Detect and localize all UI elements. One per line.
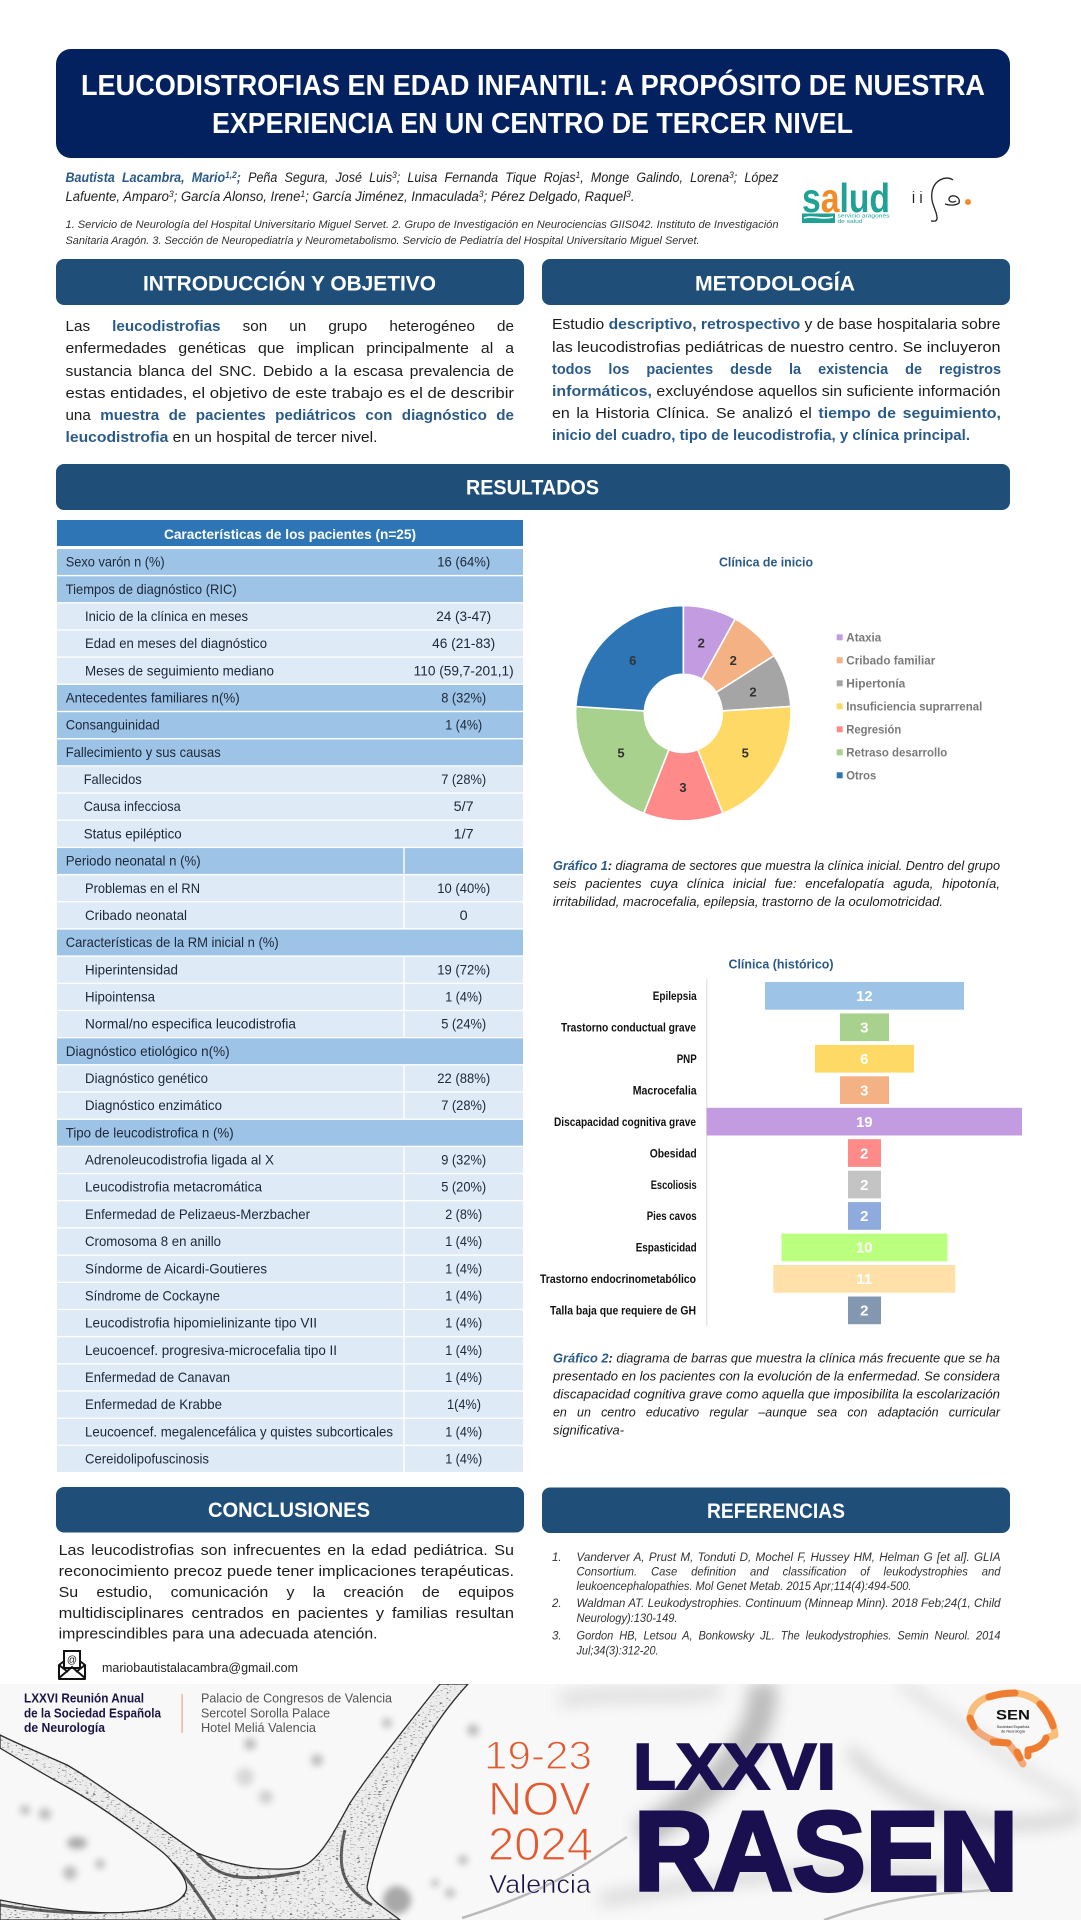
- donut chart: clínica de inicio: 5: [617, 745, 625, 760]
- bar: macrocefalia: 3: [860, 1082, 868, 1099]
- banner text: reunión anual: de Neurología: [24, 1721, 106, 1735]
- title: [56, 49, 1010, 158]
- banner text: sedes: Hotel Meliá Valencia: [201, 1721, 316, 1735]
- pie legend: Hipertonía: [846, 676, 906, 690]
- row: adrenoleucodistrofia: [57, 1147, 523, 1173]
- banner title: LXXVI RASEN: RASEN: [634, 1789, 1018, 1914]
- text: metodología: informáticos, excluyéndose aquellos sin suficiente información: [552, 384, 1000, 400]
- row: metacromática: Leucodistrofia metacromática: [85, 1180, 262, 1195]
- pie legend: Retraso desarrollo: [846, 746, 947, 760]
- heading: resultados: [56, 464, 1010, 510]
- heading: referencias: REFERENCIAS: [707, 1500, 845, 1523]
- row: seguimiento: Meses de seguimiento mediano: [85, 663, 274, 678]
- row: fallecimiento: [57, 739, 523, 765]
- bar: trastorno endocrinometabólico: Trastorno endocrinometabólico: [540, 1274, 696, 1286]
- row: enzimático: [57, 1093, 523, 1118]
- row: seguimiento: [57, 658, 523, 684]
- bar: trastorno conductual: [561, 1013, 889, 1041]
- bar chart title: clínica (histórico): Clínica (histórico): [728, 956, 834, 972]
- authors: 3: [169, 189, 174, 199]
- text: conclusiones: [59, 1542, 514, 1642]
- list: referencias: Gordon HB, Letsou A, Bonkowsky JL. The leukodystrophies. Semin Neurol. 2014: [576, 1630, 1000, 1642]
- donut chart: clínica de inicio: [576, 606, 791, 821]
- row: sexo: 16 (64%): [437, 555, 490, 570]
- text: introducción: leucodistrofia en un hospital de tercer nivel.: [66, 430, 378, 446]
- row: metacromática: 5 (20%): [441, 1180, 486, 1195]
- caption: gráfico 1: seis pacientes cuya clínica inicial fue: encefalopatía aguda, hipotonía,: [553, 876, 1000, 891]
- text: metodología: inicio del cuadro, tipo de leucodistrofia, y clínica principal.: [552, 428, 970, 444]
- title: EXPERIENCIA EN UN CENTRO DE TERCER NIVEL: [212, 108, 853, 140]
- list: referencias: 2.: [551, 1598, 562, 1610]
- row: tiempos: [57, 576, 523, 602]
- row: consanguinidad: 1 (4%): [445, 718, 482, 733]
- text: conclusiones: multidisciplinares centrados en pacientes y familias resultan: [59, 1605, 514, 1622]
- authors: 3: [392, 170, 397, 180]
- icon: envelope: [59, 1651, 85, 1679]
- banner text: fechas: NOV: [488, 1772, 592, 1825]
- heading: conclusiones: CONCLUSIONES: [208, 1499, 370, 1522]
- text: metodología: en la Historia Clínica. Se analizó el tiempo de seguimiento,: [552, 406, 1001, 422]
- row: enzimático: 7 (28%): [441, 1098, 486, 1113]
- row: aicardi: Síndorme de Aicardi-Goutieres: [85, 1261, 267, 1276]
- row: hiperintensidad: [57, 957, 523, 983]
- row: hipomielinizante: 1 (4%): [445, 1316, 482, 1331]
- icon: envelope: @: [67, 1655, 77, 1666]
- affiliations: 1. Servicio de Neurología del Hospital Universitario Miguel Servet. 2. Grupo de Investigación en Neurociencias GIIS042. Instituto de Investigación: [66, 219, 778, 231]
- banner text: sedes: [202, 1693, 392, 1732]
- bar: escoliosis: 2: [860, 1177, 868, 1194]
- authors: ;: [174, 189, 178, 204]
- row: problemas RN: [57, 875, 523, 901]
- bar: espasticidad: Espasticidad: [636, 1243, 697, 1255]
- row: hipomielinizante: [57, 1310, 523, 1336]
- text: introducción: Las leucodistrofias son un grupo heterogéneo de: [66, 319, 514, 335]
- list: referencias: Waldman AT. Leukodystrophies. Continuum (Minneap Minn). 2018 Feb;24(1, Child: [576, 1598, 1001, 1610]
- table header: Características de los pacientes (n=25): [164, 526, 416, 542]
- banner text: reunión anual: LXXVI Reunión Anual: [24, 1692, 144, 1706]
- caption: gráfico 2: discapacidad cognitiva grave como aquella que imposibilita la escolarización: [553, 1386, 1000, 1402]
- row: genético: Diagnóstico genético: [85, 1071, 208, 1086]
- authors: Peña Segura, José Luis: [249, 170, 404, 185]
- pie legend: Regresión: [846, 722, 901, 736]
- row: edad: 46 (21-83): [432, 636, 495, 651]
- row: megalencefálica: 1 (4%): [445, 1424, 482, 1439]
- text: metodología: Estudio descriptivo, retrospectivo y de base hospitalaria sobre: [552, 317, 1000, 333]
- row: periodo neonatal: [57, 848, 523, 874]
- bar: trastorno endocrinometabólico: 11: [856, 1271, 872, 1288]
- bar: espasticidad: 10: [856, 1240, 873, 1257]
- bar: pies cavos: Pies cavos: [647, 1211, 697, 1223]
- pie legend: [837, 630, 982, 782]
- authors: .: [631, 189, 634, 204]
- row: RM inicial: Características de la RM inicial n (%): [66, 935, 279, 950]
- caption: gráfico 2: presentado en los pacientes con la evolución de la enfermedad. Se considera: [552, 1368, 1000, 1384]
- row: fallecimiento: Fallecimiento y sus causas: [66, 745, 221, 760]
- row: pelizaeus: 2 (8%): [445, 1207, 482, 1222]
- caption: gráfico 2: en un centro educativo regular –aunque sea con adaptación curricular: [553, 1404, 1001, 1420]
- row: sexo: [57, 549, 523, 575]
- heading: metodología: METODOLOGÍA: [695, 272, 855, 296]
- list: referencias: leukoencephalopathies. Mol Genet Metab. 2015 Apr;114(4):494-500.: [576, 1581, 912, 1593]
- text: conclusiones: Su estudio, comunicación y la creación de equipos: [59, 1584, 514, 1601]
- bar: PNP: PNP: [677, 1054, 697, 1066]
- bar: talla baja: 2: [860, 1303, 868, 1320]
- row: krabbe: Enfermedad de Krabbe: [85, 1397, 222, 1412]
- row: cromosoma 8: Cromosoma 8 en anillo: [85, 1234, 221, 1249]
- bar: pies cavos: 2: [860, 1208, 868, 1225]
- row: problemas RN: Problemas en el RN: [85, 881, 200, 896]
- logo: SEN: Sociedad Española: [997, 1725, 1030, 1729]
- caption: gráfico 1: [553, 858, 1000, 909]
- authors: [66, 170, 779, 204]
- pie legend: Insuficiencia suprarrenal: [846, 700, 982, 714]
- authors: ;: [397, 170, 400, 185]
- logo: SEN: de Neurología: [1001, 1730, 1026, 1734]
- bar: espasticidad: [636, 1234, 948, 1261]
- banner text: sedes: Sercotel Sorolla Palace: [201, 1706, 330, 1720]
- row: metacromática: [57, 1174, 523, 1200]
- bar: escoliosis: [651, 1171, 881, 1198]
- logo: SEN: [970, 1693, 1055, 1764]
- row: cromosoma 8: [57, 1229, 523, 1254]
- bar chart: clínica (histórico): [540, 979, 1022, 1326]
- bar: escoliosis: Escoliosis: [651, 1180, 697, 1192]
- authors: Pérez Delgado, Raquel: [491, 189, 631, 204]
- heading: metodología: [542, 259, 1010, 305]
- row: cockayne: Síndrome de Cockayne: [85, 1288, 220, 1304]
- text: metodología: todos los pacientes desde la existencia de registros: [552, 362, 1001, 378]
- bar: epilepsia: 12: [856, 988, 873, 1005]
- logo: iisa: [914, 178, 971, 221]
- banner image: neuron: [0, 1684, 470, 1920]
- caption: gráfico 1: irritabilidad, macrocefalia, epilepsia, trastorno de la oculomotricidad.: [553, 894, 943, 909]
- row: antecedentes: 8 (32%): [441, 690, 486, 706]
- bar: talla baja: [550, 1296, 881, 1324]
- row: hipomielinizante: Leucodistrofia hipomielinizante tipo VII: [85, 1316, 317, 1331]
- list: referencias: [551, 1552, 1001, 1658]
- row: hipointensa: 1 (4%): [445, 990, 482, 1004]
- row: pelizaeus: Enfermedad de Pelizaeus-Merzbacher: [85, 1207, 310, 1222]
- list: referencias: Consortium. Case definition and classification of leukodystrophies and: [576, 1566, 1001, 1578]
- authors: ,: [580, 170, 584, 185]
- row: normal: 5 (24%): [441, 1017, 486, 1032]
- row: diagnóstico etiológico: [57, 1038, 523, 1064]
- text: conclusiones: imprescindibles para una adecuada atención.: [59, 1626, 378, 1642]
- row: tipo: [57, 1120, 523, 1146]
- banner: congreso LXXVI RASEN: [0, 1684, 1081, 1920]
- row: genético: 22 (88%): [437, 1071, 490, 1086]
- row: inicio: 24 (3-47): [436, 609, 491, 624]
- caption: gráfico 2: significativa-: [553, 1422, 625, 1438]
- text: introducción: [66, 319, 515, 446]
- authors: García Alonso, Irene: [181, 189, 304, 204]
- row: megalencefálica: Leucoencef. megalencefálica y quistes subcorticales: [85, 1424, 393, 1439]
- heading: referencias: [542, 1488, 1010, 1533]
- row: status: Status epiléptico: [84, 826, 182, 841]
- donut chart: clínica de inicio: 6: [629, 653, 636, 668]
- bar: obesidad: Obesidad: [650, 1148, 697, 1160]
- authors: 3: [729, 170, 734, 180]
- affiliations: [66, 219, 778, 247]
- row: causa infecciosa: 5/7: [454, 799, 474, 814]
- row: causa infecciosa: Causa infecciosa: [84, 799, 181, 814]
- row: aicardi: [57, 1256, 523, 1282]
- row: antecedentes: Antecedentes familiares n(%): [66, 690, 240, 706]
- authors: 1: [300, 189, 305, 199]
- logo: salud: salud: [802, 175, 890, 221]
- donut chart: clínica de inicio: 5: [742, 745, 749, 760]
- authors: Lafuente, Amparo: [66, 189, 172, 204]
- banner title: LXXVI RASEN: LXXVI: [633, 1730, 836, 1803]
- bar: pies cavos: [647, 1202, 881, 1230]
- row: hipointensa: Hipointensa: [85, 990, 155, 1004]
- bar: talla baja: Talla baja que requiere de GH: [550, 1306, 696, 1318]
- row: fallecidos: Fallecidos: [84, 772, 142, 787]
- pie legend: Cribado familiar: [846, 654, 936, 668]
- pie legend: Otros: [846, 768, 877, 782]
- row: fallecidos: [57, 766, 523, 792]
- banner title: LXXVI RASEN: [636, 1743, 1013, 1893]
- banner text: reunión anual: de la Sociedad Española: [24, 1706, 162, 1720]
- row: edad: Edad en meses del diagnóstico: [85, 636, 267, 651]
- row: megalencefálica: [57, 1419, 523, 1445]
- row: seguimiento: 110 (59,7-201,1): [414, 663, 514, 678]
- row: RM inicial: [57, 930, 523, 955]
- row: sexo: Sexo varón n (%): [66, 555, 165, 570]
- bar: trastorno endocrinometabólico: [540, 1265, 955, 1293]
- row: consanguinidad: Consanguinidad: [66, 718, 160, 733]
- banner text: fechas: Valencia: [489, 1869, 592, 1899]
- row: cereidolipofuscinosis: Cereidolipofuscinosis: [85, 1452, 209, 1467]
- row: progresiva: Leucoencef. progresiva-microcefalia tipo II: [85, 1343, 337, 1358]
- row: progresiva: [57, 1337, 523, 1363]
- row: tipo: Tipo de leucodistrofica n (%): [66, 1125, 234, 1140]
- text: metodología: [552, 317, 1001, 444]
- row: antecedentes: [57, 685, 523, 711]
- row: cromosoma 8: 1 (4%): [445, 1234, 482, 1249]
- authors: ;: [734, 170, 737, 185]
- text: introducción: estas entidades, el objetivo de este trabajo es el de describir: [66, 386, 514, 402]
- row: periodo neonatal: Periodo neonatal n (%): [66, 854, 201, 869]
- heading: introducción y objetivo: INTRODUCCIÓN Y OBJETIVO: [143, 272, 436, 296]
- text: introducción: una muestra de pacientes pediátricos con diagnóstico de: [66, 408, 514, 424]
- row: fallecidos: 7 (28%): [441, 772, 486, 787]
- bar: obesidad: 2: [860, 1145, 868, 1162]
- text: conclusiones: Las leucodistrofias son infrecuentes en la edad pediátrica. Su: [59, 1542, 514, 1559]
- donut chart: clínica de inicio: 2: [730, 653, 737, 668]
- bar: discapacidad cognitiva: 19: [856, 1114, 873, 1131]
- logo: salud: servicio aragonés: [838, 214, 890, 220]
- banner text: reunión anual: [24, 1692, 162, 1735]
- row: cereidolipofuscinosis: [57, 1446, 523, 1472]
- row: inicio: Inicio de la clínica en meses: [85, 609, 248, 624]
- row: inicio: [57, 604, 523, 629]
- caption: gráfico 1: Gráfico 1: diagrama de sectores que muestra la clínica inicial. Dentro del grupo: [553, 858, 1000, 873]
- bar: macrocefalia: Macrocefalia: [633, 1085, 697, 1097]
- authors: Luisa Fernanda Tique Rojas: [408, 170, 589, 185]
- authors: García Jiménez, Inmaculada: [313, 189, 484, 204]
- row: normal: Normal/no especifica leucodistrofia: [85, 1017, 296, 1032]
- heading: resultados: RESULTADOS: [466, 476, 599, 500]
- bar: epilepsia: Epilepsia: [653, 991, 697, 1003]
- row: canavan: Enfermedad de Canavan: [85, 1370, 230, 1385]
- bar: trastorno conductual: 3: [860, 1020, 868, 1036]
- bar: PNP: 6: [860, 1051, 868, 1068]
- row: genético: [57, 1066, 523, 1091]
- bar: obesidad: [650, 1139, 881, 1167]
- row: diagnóstico etiológico: Diagnóstico etiológico n(%): [66, 1044, 230, 1059]
- row: progresiva: 1 (4%): [445, 1343, 482, 1358]
- contact email: mariobautistalacambra@gmail.com: [102, 1660, 298, 1675]
- row: hiperintensidad: 19 (72%): [437, 962, 490, 977]
- bar: epilepsia: [653, 982, 964, 1010]
- authors: Bautista Lacambra, Mario: [66, 170, 225, 185]
- list: referencias: 1.: [552, 1552, 562, 1564]
- caption: gráfico 2: Gráfico 2: diagrama de barras que muestra la clínica más frecuente que se ha: [553, 1350, 1000, 1366]
- authors: 1,2: [225, 170, 237, 180]
- banner text: fechas: 19-23: [484, 1734, 592, 1778]
- row: consanguinidad: [57, 712, 523, 738]
- row: status: [57, 821, 523, 847]
- row: hiperintensidad: Hiperintensidad: [85, 962, 178, 977]
- row: krabbe: [57, 1392, 523, 1418]
- banner text: fechas: [488, 1742, 591, 1894]
- text: introducción: sustancia blanca del SNC. Debido a la escasa prevalencia de: [66, 364, 514, 380]
- row: cribado neonatal: [57, 902, 523, 928]
- caption: gráfico 2: [552, 1350, 1001, 1438]
- row: edad: [57, 631, 523, 656]
- bar: trastorno conductual: Trastorno conductual grave: [561, 1022, 696, 1034]
- donut chart: clínica de inicio: 3: [679, 780, 687, 795]
- list: referencias: Neurology):130-149.: [576, 1613, 678, 1625]
- donut chart: clínica de inicio: 2: [749, 684, 757, 699]
- donut chart: clínica de inicio: 2: [698, 636, 705, 651]
- row: cribado neonatal: Cribado neonatal: [85, 908, 187, 923]
- row: cereidolipofuscinosis: 1 (4%): [445, 1452, 482, 1467]
- list: referencias: Vanderver A, Prust M, Tonduti D, Mochel F, Hussey HM, Helman G [et al]. GLIA: [576, 1552, 1001, 1564]
- row: canavan: [57, 1364, 523, 1390]
- row: adrenoleucodistrofia: Adrenoleucodistrofia ligada al X: [85, 1153, 274, 1168]
- bar: PNP: [677, 1045, 914, 1073]
- authors: López: [745, 170, 782, 185]
- heading: conclusiones: [56, 1487, 524, 1532]
- authors: ;: [237, 170, 241, 185]
- row: problemas RN: 10 (40%): [437, 881, 490, 896]
- pie legend: Ataxia: [846, 630, 882, 644]
- row: adrenoleucodistrofia: 9 (32%): [441, 1153, 486, 1168]
- row: tiempos: Tiempos de diagnóstico (RIC): [66, 582, 237, 597]
- row: status: 1/7: [454, 826, 474, 841]
- bar: discapacidad cognitiva: Discapacidad cognitiva grave: [554, 1117, 696, 1129]
- authors: 3: [479, 189, 484, 199]
- row: enzimático: Diagnóstico enzimático: [85, 1098, 222, 1113]
- title: LEUCODISTROFIAS EN EDAD INFANTIL: A PROPÓSITO DE NUESTRA: [81, 68, 985, 102]
- authors: ;: [484, 189, 488, 204]
- row: krabbe: 1(4%): [447, 1397, 481, 1412]
- row: hipointensa: [57, 984, 523, 1010]
- table: características de los pacientes: [57, 520, 523, 1472]
- banner background: blurred neurons: [20, 1684, 1081, 1920]
- list: referencias: Jul;34(3):312-20.: [576, 1646, 658, 1658]
- row: causa infecciosa: [57, 794, 523, 820]
- text: introducción: enfermedades genéticas que implican principalmente al a: [66, 341, 515, 357]
- bar: macrocefalia: [633, 1076, 889, 1104]
- authors: 3: [626, 189, 631, 199]
- list: referencias: 3.: [552, 1630, 562, 1642]
- row: cribado neonatal: 0: [460, 908, 468, 923]
- row: cockayne: [57, 1283, 523, 1309]
- row: canavan: 1 (4%): [445, 1370, 482, 1385]
- logo: SEN: SEN: [996, 1706, 1030, 1722]
- row: pelizaeus: [57, 1201, 523, 1227]
- affiliations: Sanitaria Aragón. 3. Sección de Neuropediatría y Neurometabolismo. Servicio de Pediatría del Hospital Universitario Miguel Servet.: [66, 235, 700, 247]
- authors: ;: [305, 189, 309, 204]
- row: aicardi: 1 (4%): [445, 1261, 482, 1276]
- text: conclusiones: reconocimiento precoz puede tener implicaciones terapéuticas.: [59, 1563, 514, 1580]
- row: cockayne: 1 (4%): [445, 1288, 482, 1304]
- logo: salud: de salud: [838, 219, 862, 225]
- table header: [57, 520, 523, 546]
- banner text: sedes: Palacio de Congresos de Valencia: [201, 1692, 392, 1706]
- bar: discapacidad cognitiva: [554, 1108, 1022, 1136]
- heading: introducción y objetivo: [56, 259, 524, 305]
- pie chart title: clínica de inicio: Clínica de inicio: [719, 554, 813, 570]
- banner text: fechas: 2024: [488, 1818, 593, 1870]
- authors: Monge Galindo, Lorena: [591, 170, 741, 185]
- authors: 1: [576, 170, 580, 180]
- text: metodología: las leucodistrofias pediátricas de nuestro centro. Se incluyeron: [552, 340, 1000, 356]
- row: normal: [57, 1011, 523, 1037]
